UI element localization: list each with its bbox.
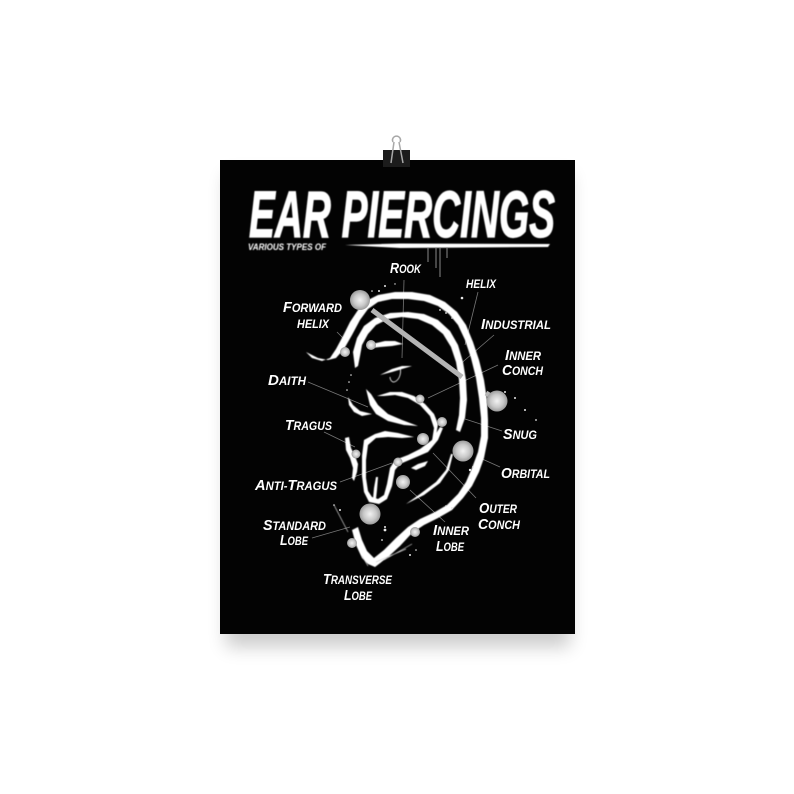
title <box>248 177 555 253</box>
label: Anti-Tragus: ANTI-TRAGUS <box>254 477 337 494</box>
label: Forward Helix: FORWARD <box>283 299 342 316</box>
label: Inner Lobe: INNER <box>433 522 470 539</box>
antihelix crescent <box>366 389 418 426</box>
inner helix fold <box>353 312 467 432</box>
title: EAR PIERCINGS <box>249 177 555 251</box>
label: Tragus: TRAGUS <box>285 417 332 434</box>
helix branch <box>372 341 403 348</box>
label: Inner Conch <box>502 347 544 379</box>
label: Forward Helix <box>283 299 342 331</box>
label: Inner Lobe <box>433 522 470 555</box>
label: Standard Lobe <box>263 517 326 549</box>
inner lobe line <box>406 454 453 504</box>
label: Rook: ROOK <box>390 260 422 277</box>
poster panel <box>220 160 575 634</box>
paint drips <box>428 248 447 277</box>
piercing: bar end <box>486 393 497 400</box>
label: Standard Lobe: LOBE <box>280 532 308 549</box>
ear illustration <box>306 292 488 567</box>
label: Outer Conch: CONCH <box>478 516 521 533</box>
icon: binder clip <box>383 136 410 167</box>
piercing: industrial bar <box>372 310 462 377</box>
labels <box>254 260 551 604</box>
paint splatter <box>333 283 537 556</box>
label: Snug: SNUG <box>503 426 537 443</box>
label: Inner Conch: INNER <box>505 347 542 364</box>
tragus <box>345 437 358 481</box>
label: Inner Conch: CONCH <box>502 362 544 379</box>
concha <box>362 427 443 504</box>
label: Helix: HELIX <box>466 277 497 291</box>
label: Outer Conch <box>478 500 521 533</box>
lobe fringe <box>334 505 412 566</box>
label: Transverse Lobe: TRANSVERSE <box>323 571 392 588</box>
label: Transverse Lobe: LOBE <box>344 587 372 604</box>
label: Forward Helix: HELIX <box>297 317 330 331</box>
leader lines <box>308 280 502 538</box>
label: Daith: DAITH <box>268 372 307 389</box>
label: Standard Lobe: STANDARD <box>263 517 326 534</box>
label: Transverse Lobe <box>323 571 392 604</box>
rook crescent <box>380 366 412 375</box>
antitragus dash <box>411 461 428 470</box>
label: Outer Conch: OUTER <box>479 500 518 517</box>
antihelix top arc <box>377 392 438 441</box>
subtitle: VARIOUS TYPES OF <box>248 242 326 253</box>
daith fold <box>348 397 372 416</box>
outer helix and lobe <box>306 292 488 567</box>
label: Industrial: INDUSTRIAL <box>481 316 551 333</box>
inner concha V <box>373 477 378 499</box>
poster shadow <box>226 175 570 647</box>
label: Inner Lobe: LOBE <box>436 538 464 555</box>
title underline <box>345 244 550 248</box>
piercing studs <box>340 290 508 548</box>
label: Orbital: ORBITAL <box>501 465 550 482</box>
rook curl <box>390 367 401 382</box>
